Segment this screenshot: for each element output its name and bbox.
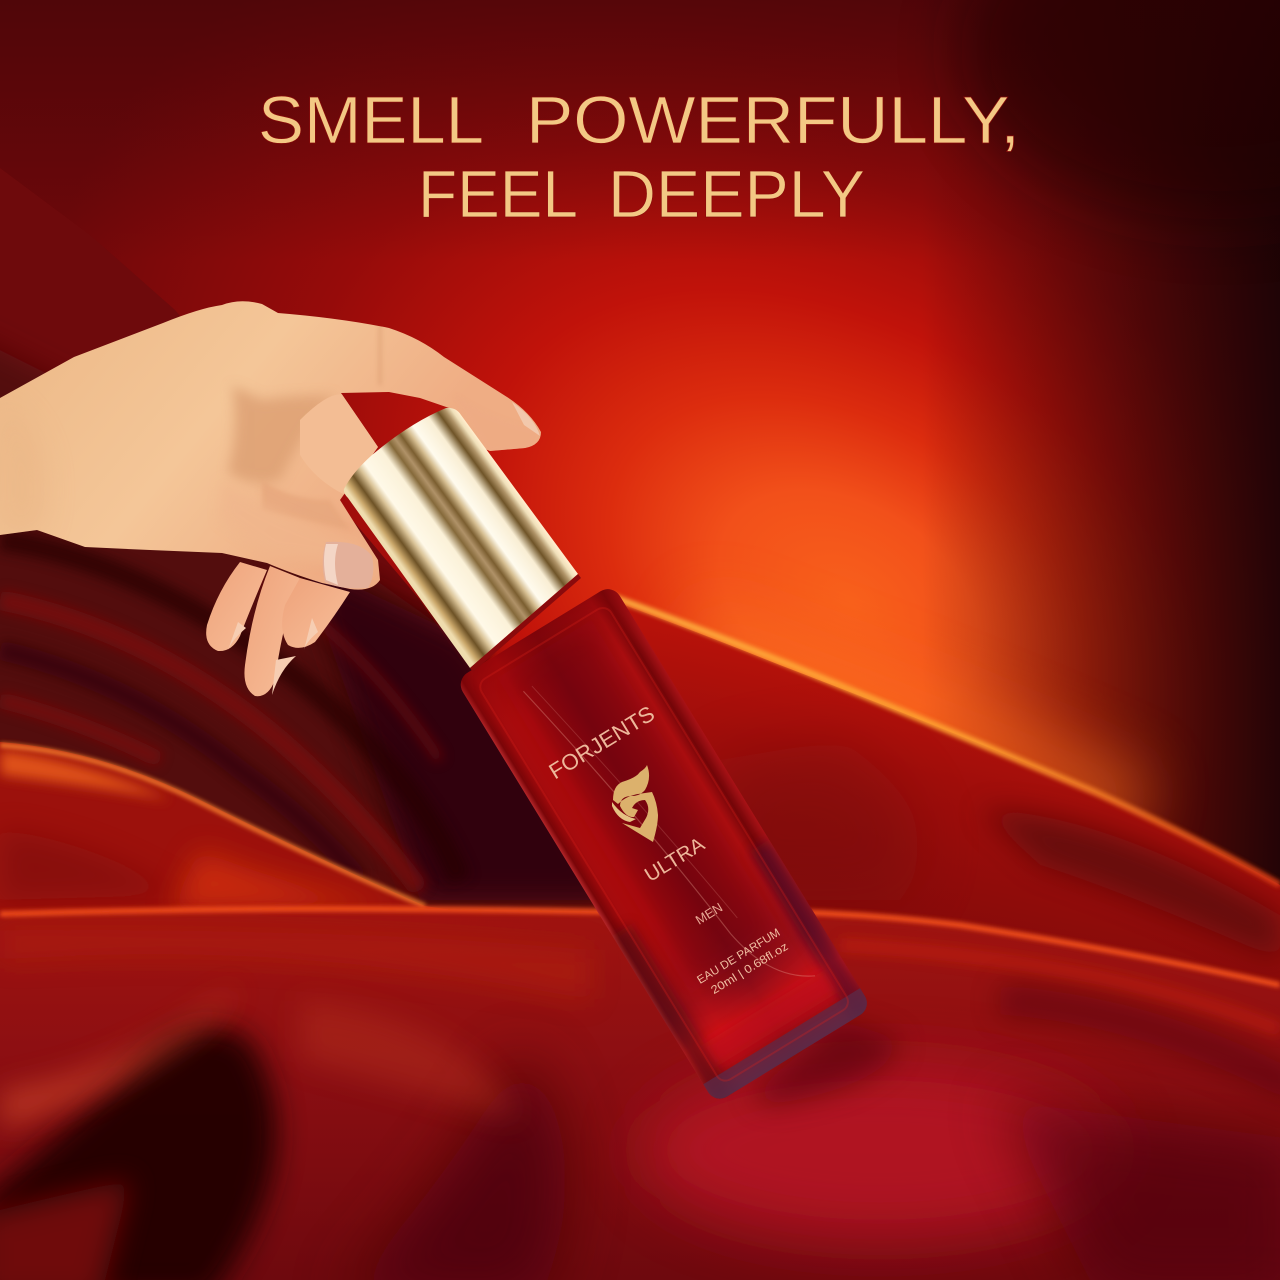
thumbnail [323,542,373,588]
silk band: ridge behind bottle with orange highlight [600,596,1280,1000]
bottle label: men: MEN [693,900,725,928]
title: POWERFULLY, [526,83,1020,158]
hand [0,301,541,696]
satin foreground [0,909,1280,1280]
title: FEEL [418,157,578,232]
hand: back fingers [206,562,350,696]
bottle label: eau de parfum: EAU DE PARFUM [695,927,783,987]
title: SMELL [258,83,484,158]
bottle label: volume: 20ml | 0.68fl.oz [709,941,791,997]
bottle body [456,584,872,1104]
index fingernail [512,402,540,436]
perfume bottle [344,408,872,1104]
silk band: left wave with highlight [0,742,520,930]
silk band: upper left dark fold [0,168,620,900]
bottle label: ultra: ULTRA [641,833,709,887]
bottle label: brand: FORJENTS [544,701,659,784]
bottle cap [344,408,581,672]
title: DEEPLY [608,157,865,232]
title [258,83,1020,232]
icon: gold flame shield logo [612,765,658,842]
hand: palm, index finger, thumb [0,301,541,590]
